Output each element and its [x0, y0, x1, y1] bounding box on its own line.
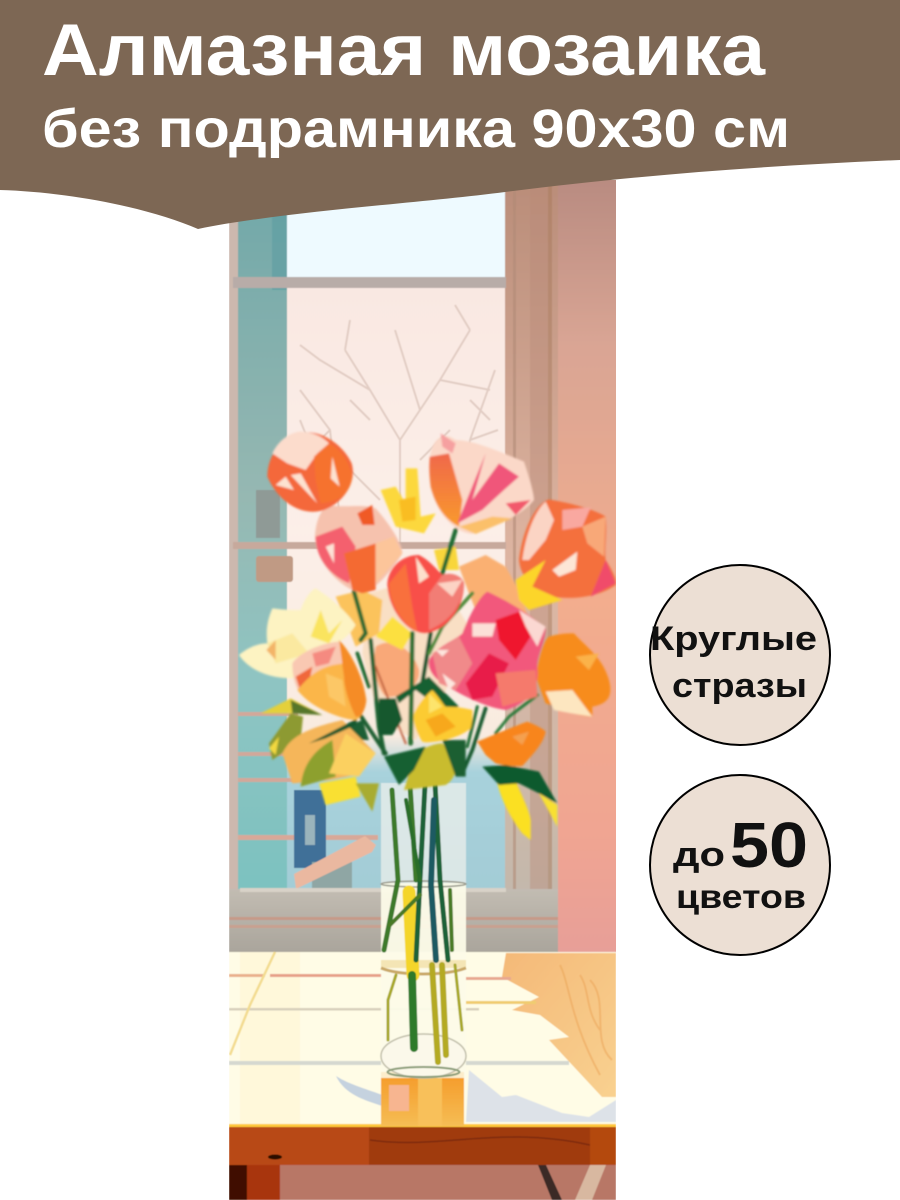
cream mass behind bouquet	[362, 573, 469, 740]
badge: round rhinestones	[650, 565, 830, 745]
yellow daffodil behind top	[381, 468, 436, 533]
left frame edge	[229, 170, 238, 952]
centre red tulip	[387, 555, 464, 633]
badge: round rhinestones: Круглые	[650, 620, 817, 658]
dark leaves centre	[346, 677, 459, 740]
badge: up to 50 colours: 50	[730, 809, 808, 881]
header banner	[0, 0, 900, 229]
window glass	[287, 288, 507, 893]
top left tulip	[267, 432, 353, 512]
badge: up to 50 colours	[650, 775, 830, 955]
right orange lily	[536, 633, 610, 717]
table apron	[229, 1127, 616, 1165]
bare trees	[300, 305, 498, 545]
sky pane	[286, 192, 506, 277]
left leaves	[261, 698, 379, 812]
lower right leaf	[482, 765, 557, 840]
peach petals right	[459, 555, 529, 627]
right tulip	[516, 499, 616, 610]
yellow small flower	[414, 690, 472, 742]
table top	[229, 952, 616, 1128]
bouquet	[239, 432, 616, 840]
badge: up to 50 colours: цветов	[676, 878, 806, 915]
handle	[256, 490, 293, 582]
lower window frame	[229, 888, 558, 952]
peach petal centre	[374, 643, 419, 697]
left mid tulip	[315, 505, 402, 593]
outside blue chair	[294, 790, 376, 892]
badge: up to 50 colours: до	[673, 836, 725, 874]
bottom orange flower	[477, 722, 546, 766]
title: Алмазная мозаика	[42, 10, 767, 91]
under table	[229, 1165, 616, 1200]
table shadows	[336, 1076, 382, 1106]
small orange tulip	[292, 640, 366, 720]
top centre tulip	[429, 433, 534, 534]
stems	[354, 530, 537, 773]
photo: tulips in a vase by the window	[229, 170, 625, 1200]
wall	[557, 180, 616, 953]
vase	[381, 783, 466, 1126]
left teal pane	[238, 170, 287, 895]
window cross bars	[233, 277, 506, 840]
stems in the vase	[384, 783, 462, 1062]
pink flower	[429, 592, 546, 710]
right window frame	[505, 170, 558, 952]
yellow petals behind stem	[336, 590, 382, 647]
badge: round rhinestones: стразы	[672, 667, 807, 705]
pale yellow daffodil	[239, 588, 356, 678]
bottom centre leaves	[384, 740, 466, 790]
subtitle: без подрамника 90х30 см	[42, 99, 790, 159]
